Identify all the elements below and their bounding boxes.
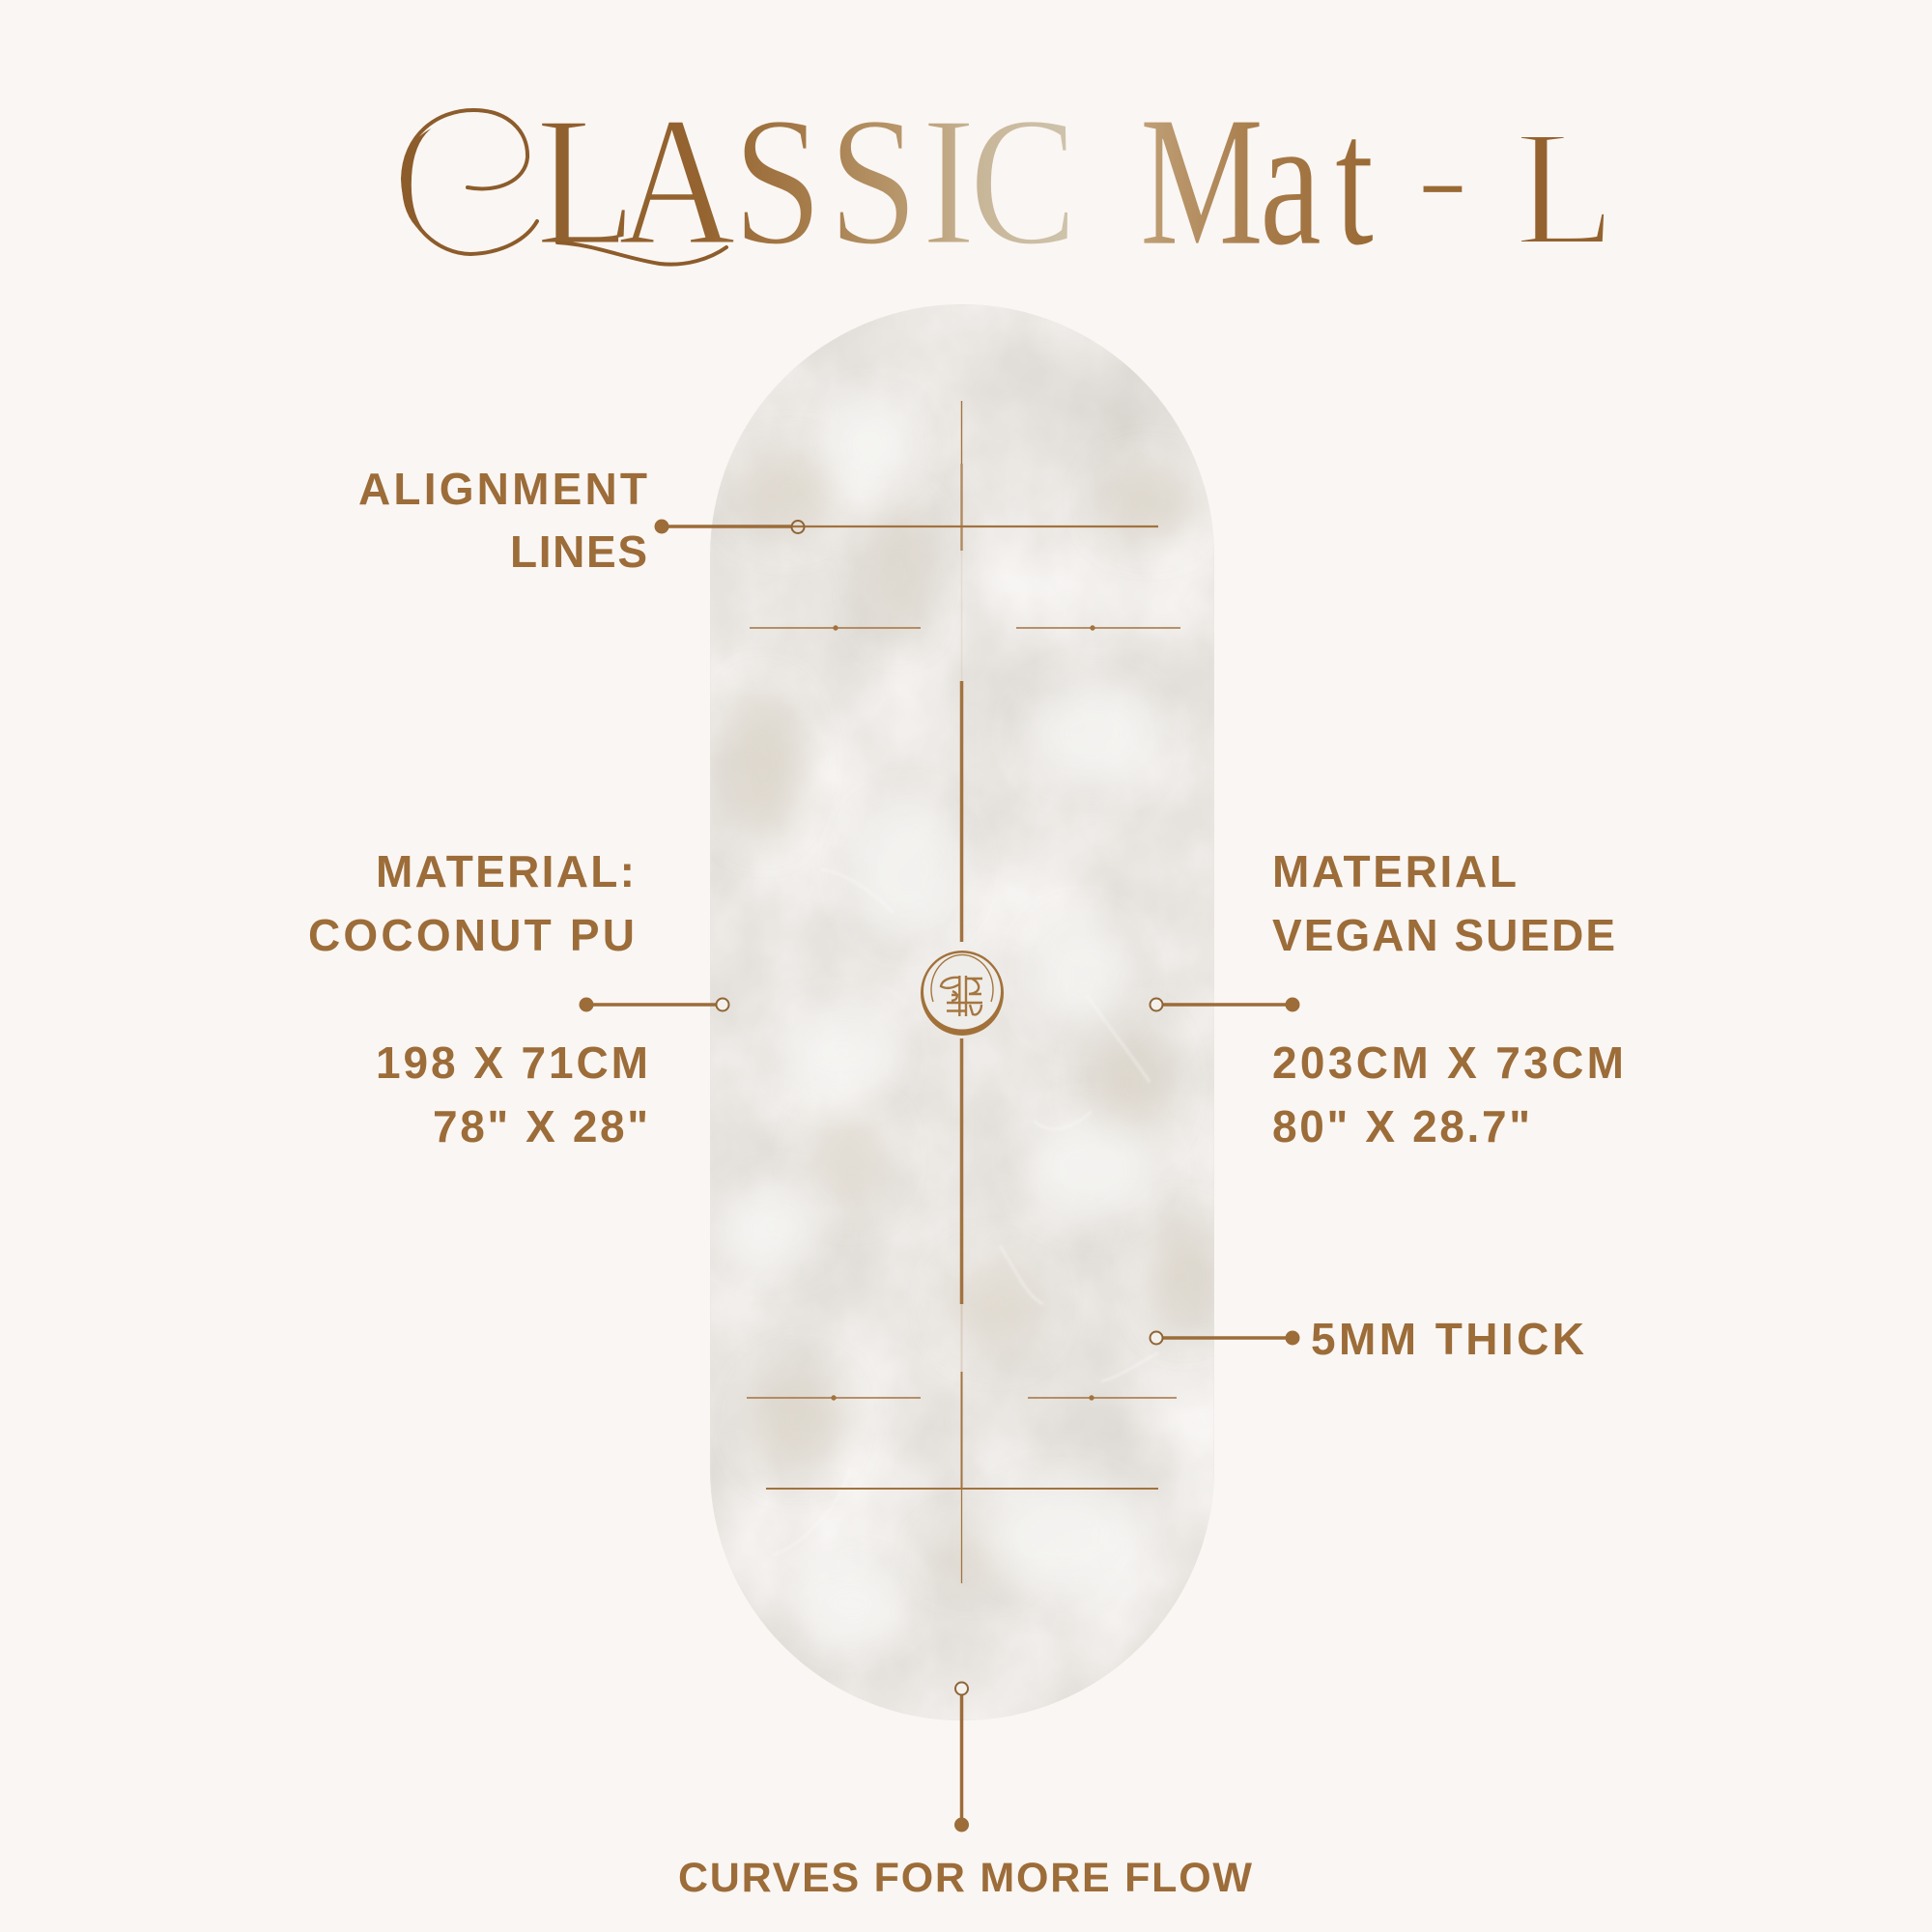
panel: yoga mat	[710, 304, 1217, 1720]
curves label: CURVES FOR MORE FLOW	[678, 1855, 1252, 1901]
top horizontal line	[710, 526, 1158, 527]
callout: alignment lines	[358, 464, 804, 577]
alignment lines	[710, 401, 1180, 1583]
title word Mat: Mat	[1140, 78, 1374, 284]
bottom material connector	[1150, 997, 1300, 1012]
callout: top material	[308, 846, 728, 1151]
alignment label: LINES	[510, 526, 647, 577]
top material dimensions: 78" X 28"	[433, 1101, 648, 1151]
bottom material label: VEGAN SUEDE	[1272, 910, 1615, 960]
lower short lines	[747, 1396, 1177, 1400]
title dash: -	[1413, 68, 1472, 273]
top material dimensions	[376, 1037, 648, 1151]
title initial C: C	[385, 68, 537, 297]
title	[385, 68, 1615, 297]
bottom material dimensions: 203CM X 73CM	[1272, 1037, 1624, 1088]
top material label	[308, 846, 635, 960]
bottom horizontal line	[766, 1488, 1158, 1490]
title letter L: L	[1515, 97, 1615, 279]
top material label: COCONUT PU	[308, 910, 635, 960]
thickness connector	[1150, 1331, 1300, 1345]
top material label: MATERIAL:	[376, 846, 635, 896]
curves connector	[954, 1683, 969, 1832]
bottom material label: MATERIAL	[1272, 846, 1517, 896]
upper short lines	[750, 626, 1180, 630]
bottom material dimensions	[1272, 1037, 1624, 1151]
alignment label	[358, 464, 647, 577]
alignment connector	[655, 520, 804, 533]
bottom material dimensions: 80" X 28.7"	[1272, 1101, 1530, 1151]
title flourish	[403, 110, 726, 265]
bottom material label	[1272, 846, 1615, 960]
top material connector	[580, 997, 728, 1012]
vertical centre line	[960, 401, 962, 1583]
thickness label: 5MM THICK	[1311, 1314, 1584, 1364]
callout: bottom material	[1150, 846, 1624, 1151]
callout: curves	[678, 1683, 1252, 1901]
top material dimensions: 198 X 71CM	[376, 1037, 648, 1088]
title word LASSIC: LASSIC	[536, 79, 1078, 284]
alignment label: ALIGNMENT	[358, 464, 647, 514]
icon: mat logo	[921, 951, 1004, 1036]
callout: thickness	[1150, 1314, 1584, 1364]
